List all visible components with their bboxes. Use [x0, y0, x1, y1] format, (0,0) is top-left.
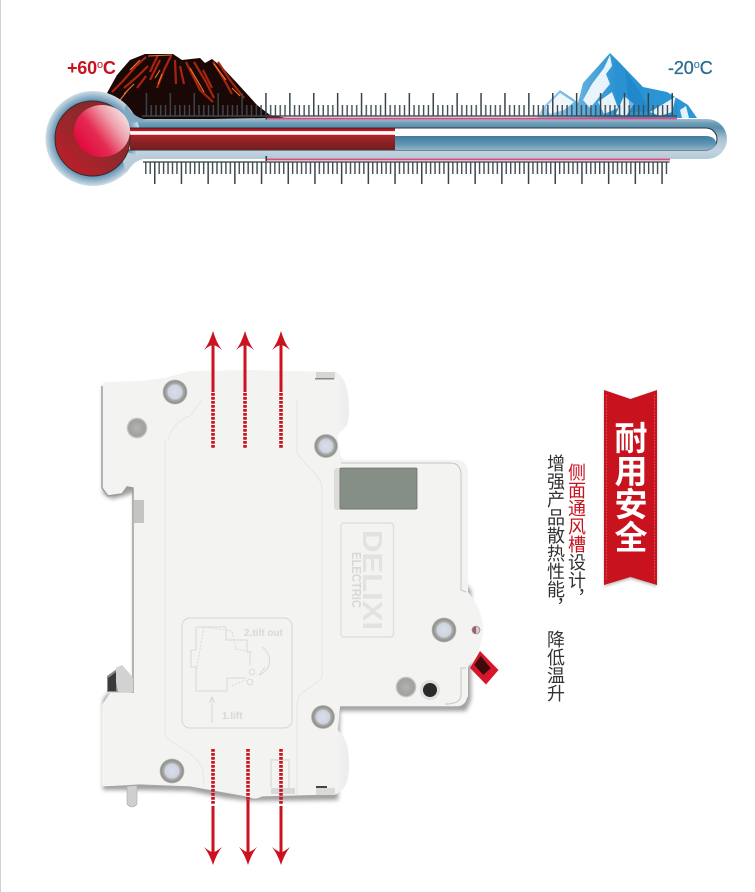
removal instruction panel — [182, 618, 292, 728]
label: +60°C: C — [103, 58, 116, 78]
label: -20°C: o — [694, 59, 700, 71]
scale accent lines — [266, 115, 677, 161]
icon: volcano — [107, 54, 287, 120]
arrow down 2 — [239, 749, 257, 865]
arrow down 1 — [204, 749, 222, 865]
logo text: DELIXI: DELIXI — [357, 530, 388, 630]
chart: lower temperature scale — [143, 161, 670, 185]
arrow up 1 — [204, 331, 222, 448]
red toggle handle — [470, 651, 498, 684]
ribbon banner — [604, 390, 657, 587]
small slots — [316, 372, 335, 379]
icon: snow mountain — [537, 53, 697, 118]
logo text: ELECTRIC: ELECTRIC — [349, 552, 363, 608]
moulded contour lines — [165, 400, 322, 795]
feature text: left column: 增强产品散热性能， 降低温升 — [545, 454, 565, 702]
hole: lower grey — [396, 676, 416, 698]
right terminal lobes — [318, 372, 349, 446]
hole: mounting — [126, 418, 148, 438]
instruction label: 2.tilt out: 2.tilt out — [244, 628, 284, 639]
screw: right middle — [432, 618, 456, 642]
embossed logo panel — [341, 523, 394, 637]
arrow down 3 — [272, 749, 290, 865]
breaker main outline — [102, 370, 483, 799]
label: +60°C: +60 — [67, 58, 97, 78]
ribbon title: 耐用安全 — [610, 421, 647, 553]
arrows: upward airflow — [204, 331, 290, 448]
hole: lower dark — [420, 680, 440, 700]
breaker shadow — [103, 386, 471, 801]
screw: top left — [162, 380, 188, 404]
arrows: downward airflow — [204, 749, 290, 865]
label: +60°C: o — [97, 59, 103, 71]
pin — [127, 785, 137, 807]
left mounting clip — [107, 665, 133, 692]
display window — [334, 468, 417, 510]
thermometer bulb — [55, 101, 130, 176]
indicator dot — [472, 626, 480, 634]
instruction label: 1.lift: 1.lift — [222, 711, 243, 722]
label: -20°C: -20 — [668, 58, 694, 78]
screw: top right — [314, 434, 338, 458]
left tab — [134, 500, 144, 523]
screw: bottom right — [311, 705, 335, 729]
arrow up 3 — [272, 331, 290, 448]
breaker body — [102, 370, 483, 807]
instruction diagram — [191, 627, 270, 723]
chart: upper temperature scale — [142, 93, 677, 117]
tube inner channel — [125, 128, 717, 150]
label: -20°C: C — [700, 58, 713, 78]
feature text: right column: 侧面通风槽 设计， — [566, 463, 586, 607]
screw: bottom left — [160, 758, 184, 784]
arrow up 2 — [236, 331, 254, 448]
thermometer — [46, 91, 727, 186]
